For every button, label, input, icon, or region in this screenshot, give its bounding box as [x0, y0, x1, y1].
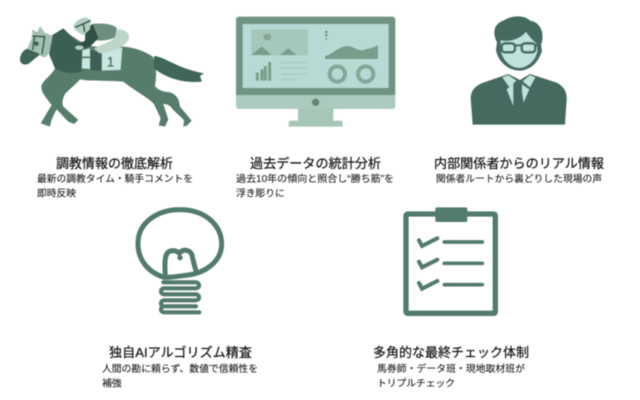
heading and text: statistical analysis: 過去10年の傾向と照合し“勝ち筋”を [236, 172, 394, 185]
icon: businessman with glasses [471, 16, 567, 125]
heading and text: insider info: 関係者ルートから裏どりした現場の声 [436, 172, 602, 185]
icon: racehorse and jockey [20, 18, 204, 127]
icon: light bulb [138, 210, 222, 312]
heading and text: training analysis [37, 156, 193, 200]
heading and text: final check: トリプルチェック [377, 378, 455, 390]
heading and text: proprietary AI: 独自AIアルゴリズム精査 [109, 345, 252, 360]
heading and text: statistical analysis: 浮き彫りに [236, 188, 285, 200]
icon: desktop monitor dashboard [236, 17, 395, 127]
heading and text: training analysis: 最新の調教タイム・騎手コメントを [37, 172, 193, 185]
heading and text: statistical analysis: 過去データの統計分析 [250, 156, 381, 171]
heading and text: final check: 多角的な最終チェック体制 [373, 345, 529, 360]
heading and text: final check [373, 345, 529, 390]
heading and text: training analysis: 調教情報の徹底解析 [56, 156, 173, 171]
heading and text: insider info: 内部関係者からのリアル情報 [434, 156, 604, 171]
heading and text: insider info [434, 156, 604, 185]
icon: racehorse and jockey: 1 [107, 54, 115, 70]
heading and text: proprietary AI: 補強 [102, 376, 122, 390]
heading and text: final check: 馬券師・データ班・現地取材班が [377, 362, 525, 375]
heading and text: proprietary AI [102, 345, 258, 390]
icon: clipboard checklist [406, 207, 495, 313]
heading and text: proprietary AI: 人間の勘に頼らず、数値で信頼性を [102, 362, 258, 375]
heading and text: training analysis: 即時反映 [37, 188, 76, 200]
heading and text: statistical analysis [236, 156, 394, 200]
